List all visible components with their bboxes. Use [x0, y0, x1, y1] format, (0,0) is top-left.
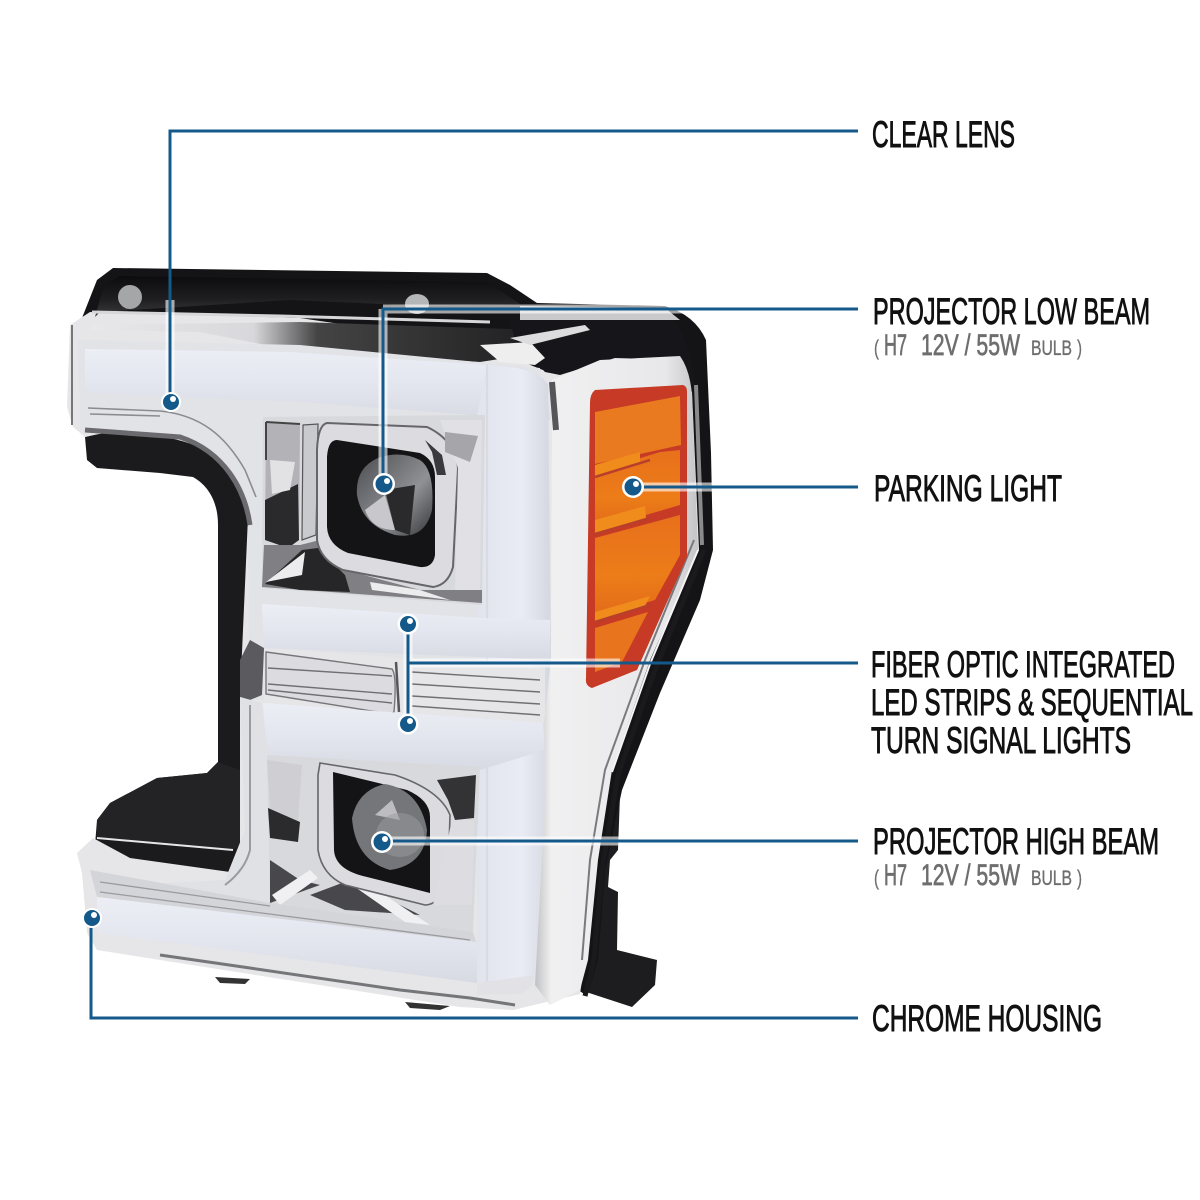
lens bright facet	[365, 495, 395, 530]
low beam recess	[262, 415, 485, 605]
corner chrome highlight	[480, 342, 545, 365]
left chrome dark shadow	[552, 382, 556, 430]
lower bezel chrome	[90, 870, 477, 945]
leader lines	[408, 624, 858, 723]
dot	[373, 473, 395, 495]
bulb spec: H7	[884, 859, 907, 892]
recess background	[267, 755, 480, 932]
lower DRL light tube	[97, 897, 477, 983]
callout: chrome housing	[82, 908, 1102, 1039]
bulb spec: 12V / 55W	[921, 859, 1020, 892]
chrome housing body	[67, 312, 699, 1010]
lower dot	[398, 714, 418, 734]
chrome frame	[318, 763, 450, 905]
projector lens	[352, 784, 427, 870]
projector lens	[357, 454, 432, 536]
amber segment four	[595, 612, 648, 672]
callout: projector high beam	[371, 820, 1159, 892]
upper dot	[398, 614, 418, 634]
high beam recess	[267, 755, 480, 932]
lens bright facet	[375, 800, 400, 820]
stem end chrome	[240, 640, 264, 700]
bottom mount nubs	[215, 977, 450, 1010]
strip separator	[396, 662, 399, 712]
amber lens outer	[586, 385, 687, 688]
bottom tube right corner	[477, 975, 535, 995]
chrome reflector base	[262, 540, 482, 603]
right dark corner frame	[510, 320, 696, 395]
reflector dark facets	[265, 548, 350, 592]
silver top rim	[520, 306, 680, 320]
callout halos	[170, 300, 720, 841]
left reflector	[267, 760, 302, 820]
bulb spec: )	[1077, 337, 1082, 360]
lower DRL tube	[263, 703, 545, 770]
panel white edge highlight	[612, 550, 698, 772]
amber bright bands	[595, 452, 650, 622]
leader line	[382, 840, 858, 842]
black connector module	[97, 762, 240, 850]
visor mount clip left	[118, 285, 142, 309]
lens dark wedge	[385, 485, 415, 535]
amber upper segment	[595, 396, 681, 464]
vertical DRL light tube	[477, 365, 551, 983]
left reflector dark bottom	[265, 484, 299, 548]
leader line	[383, 309, 858, 484]
projector dark interior	[333, 772, 430, 893]
bulb spec: H7	[884, 329, 907, 362]
trim groove	[88, 408, 256, 497]
chrome panel glint	[445, 432, 478, 462]
chrome lower facets	[270, 860, 420, 915]
strip groove lines	[268, 668, 540, 715]
connector highlight	[97, 838, 233, 850]
curved chrome bezel shadow	[85, 430, 250, 525]
label: PARKING LIGHT	[874, 467, 1062, 509]
amber parking light	[586, 385, 687, 688]
label	[871, 643, 1193, 761]
rear mounting bracket	[580, 790, 657, 1007]
left reflector dark	[268, 808, 300, 842]
right chrome panel	[440, 420, 482, 590]
dot	[82, 908, 102, 928]
callout: fiber optic LED strips	[398, 614, 1193, 761]
tinted visor and dark rim	[82, 268, 713, 996]
upper right dark glint	[437, 775, 476, 820]
amber segment three	[595, 515, 680, 618]
left reflector top edge	[266, 422, 300, 460]
dot	[161, 392, 181, 412]
top rim streak	[510, 325, 590, 345]
right chrome panel	[433, 820, 474, 905]
projector chrome frame	[317, 423, 458, 587]
frame dark glint	[425, 440, 446, 475]
black rear housing	[85, 430, 248, 880]
visor mount clip right	[405, 294, 429, 314]
left stem chrome	[100, 697, 270, 903]
upper chrome bezel	[78, 340, 552, 700]
leader line	[634, 486, 858, 488]
right side chrome panel	[535, 356, 698, 1005]
bulb spec: BULB	[1031, 337, 1072, 360]
bright chrome facet	[272, 870, 430, 925]
lens top highlight stripe	[92, 312, 490, 322]
left lens edge	[71, 325, 73, 425]
middle DRL tube	[262, 604, 550, 660]
amber segment two	[595, 450, 680, 530]
callout: clear lens	[161, 113, 1015, 412]
sequential LED strip panel	[240, 640, 545, 723]
lens reflected glow	[376, 813, 424, 857]
label: CLEAR LENS	[872, 113, 1015, 155]
bulb spec	[874, 859, 1082, 892]
inner turn signal plate	[266, 652, 395, 714]
upper DRL light tube	[85, 349, 550, 420]
dot	[371, 831, 393, 853]
projector dark interior	[327, 440, 435, 567]
panel outer black line	[585, 550, 704, 996]
callout: parking light	[622, 467, 1062, 509]
bulb spec: BULB	[1031, 867, 1072, 890]
leader line	[170, 131, 858, 400]
visor interior reflection	[95, 276, 520, 317]
panel inner curve highlights	[582, 540, 694, 960]
bulb spec: (	[874, 867, 879, 890]
bulb spec: (	[874, 337, 879, 360]
bulb spec: )	[1077, 867, 1082, 890]
lower edge shadow	[160, 955, 515, 1005]
left reflector highlight	[270, 460, 295, 494]
right silver edge	[696, 385, 702, 545]
bulb spec	[874, 329, 1082, 362]
clear lens upper reflection band	[90, 322, 545, 362]
side trim line	[486, 365, 488, 985]
headlight assembly	[67, 268, 713, 1010]
stem inner shadow	[225, 705, 250, 885]
recess background	[262, 415, 485, 605]
callout: projector low beam	[373, 290, 1150, 495]
left reflector	[265, 422, 300, 548]
lower trim line	[100, 882, 470, 940]
reflector light streak	[266, 552, 450, 600]
strip panel base	[264, 648, 545, 723]
bulb spec: 12V / 55W	[921, 329, 1020, 362]
amber dark separators	[595, 460, 650, 622]
dot	[622, 476, 644, 498]
chrome pillar	[302, 424, 318, 540]
leader line	[91, 918, 858, 1018]
